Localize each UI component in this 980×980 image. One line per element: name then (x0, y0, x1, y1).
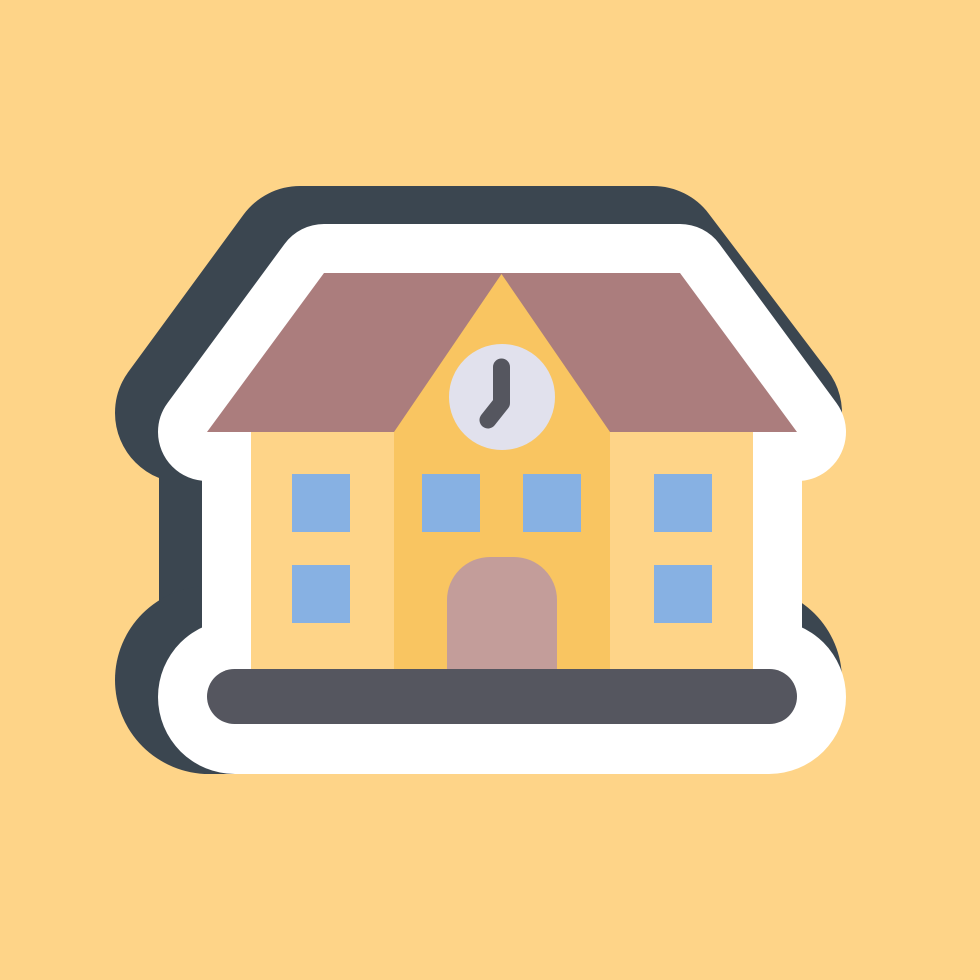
ground bar (207, 669, 797, 724)
roof (207, 273, 797, 432)
building left wing (251, 425, 396, 675)
central tower (394, 274, 610, 675)
building right wing (608, 425, 753, 675)
door (447, 557, 557, 675)
windows (292, 474, 712, 623)
sticker shadow (115, 256, 842, 774)
clock (449, 344, 555, 450)
sticker white outline (158, 273, 846, 774)
